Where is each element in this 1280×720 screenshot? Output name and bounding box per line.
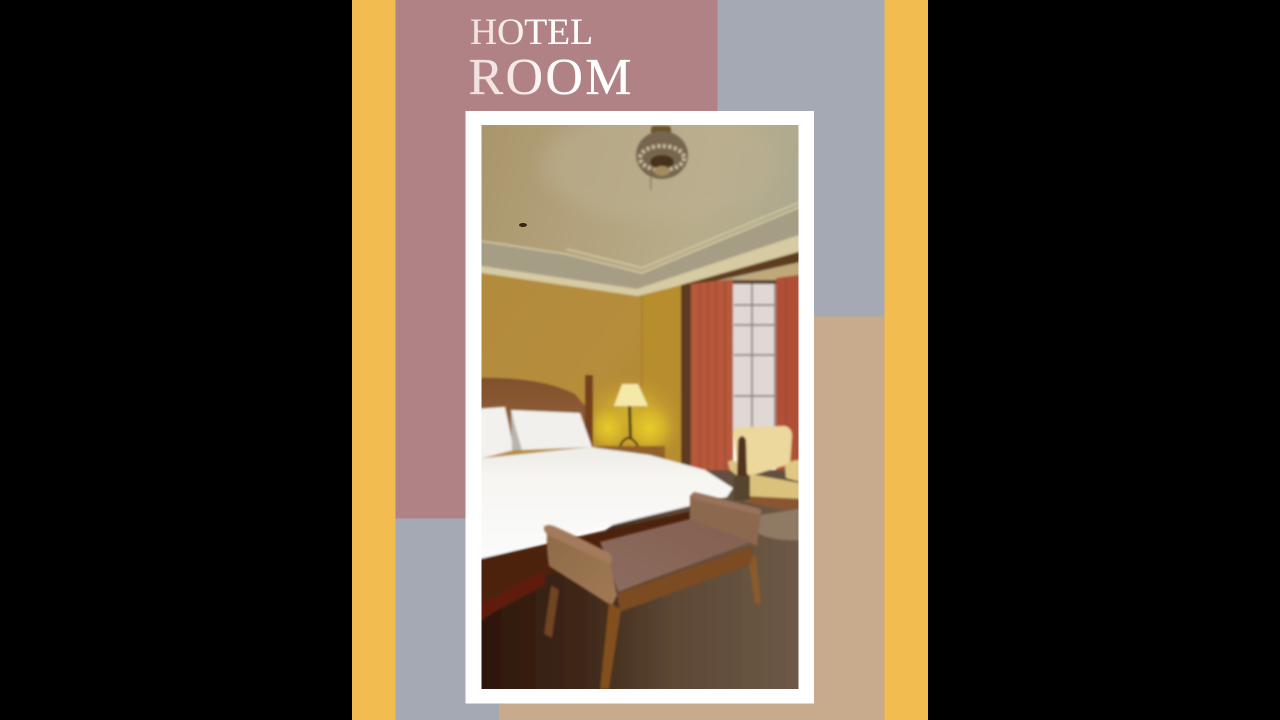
title line: HOTEL: HOTEL bbox=[470, 12, 593, 53]
armchair bbox=[728, 426, 805, 510]
bed duvet bbox=[475, 447, 733, 560]
pillows bbox=[475, 407, 592, 460]
panel: top right grey block bbox=[718, 0, 884, 316]
table lamp bbox=[614, 384, 648, 446]
right curtain bbox=[774, 274, 798, 472]
right rear leg bbox=[748, 556, 761, 604]
panel: tan block bbox=[499, 316, 884, 720]
left curtain bbox=[691, 279, 733, 505]
panel: bottom left grey block bbox=[396, 518, 499, 720]
front left leg bbox=[600, 602, 621, 689]
window header bbox=[680, 250, 798, 289]
valance above window bbox=[736, 262, 798, 281]
rear left leg bbox=[544, 585, 559, 638]
front rail bbox=[617, 546, 753, 612]
seat cushion bbox=[600, 519, 752, 592]
ceiling fan fixture bbox=[636, 126, 688, 190]
ceiling bbox=[482, 125, 798, 286]
nightstand bbox=[596, 446, 665, 459]
lamp glow on wall bbox=[592, 386, 674, 447]
photo: hotel room scene bbox=[475, 109, 806, 695]
panel: right yellow stripe bbox=[884, 0, 928, 720]
dark base behind chair bbox=[706, 468, 798, 506]
ceiling recess highlight bbox=[544, 125, 652, 209]
title bbox=[468, 12, 632, 106]
left wall bbox=[482, 272, 644, 460]
bed frame bbox=[475, 511, 690, 625]
floor light patch bbox=[758, 508, 798, 541]
window bbox=[730, 280, 776, 432]
ceiling sprinkler bbox=[519, 223, 527, 227]
panel: left yellow stripe bbox=[352, 0, 396, 720]
wall corner shade bbox=[642, 297, 643, 298]
crown molding bbox=[475, 200, 805, 297]
panel: rose block bbox=[396, 0, 718, 518]
title line: ROOM: ROOM bbox=[468, 49, 632, 106]
bench bbox=[544, 492, 762, 689]
right arm bbox=[690, 495, 761, 546]
left arm bbox=[547, 532, 617, 606]
floor bbox=[475, 505, 805, 695]
curtain post bbox=[681, 287, 691, 472]
headboard bbox=[475, 375, 593, 448]
white photo frame bbox=[466, 111, 814, 704]
right wall bbox=[642, 285, 682, 490]
